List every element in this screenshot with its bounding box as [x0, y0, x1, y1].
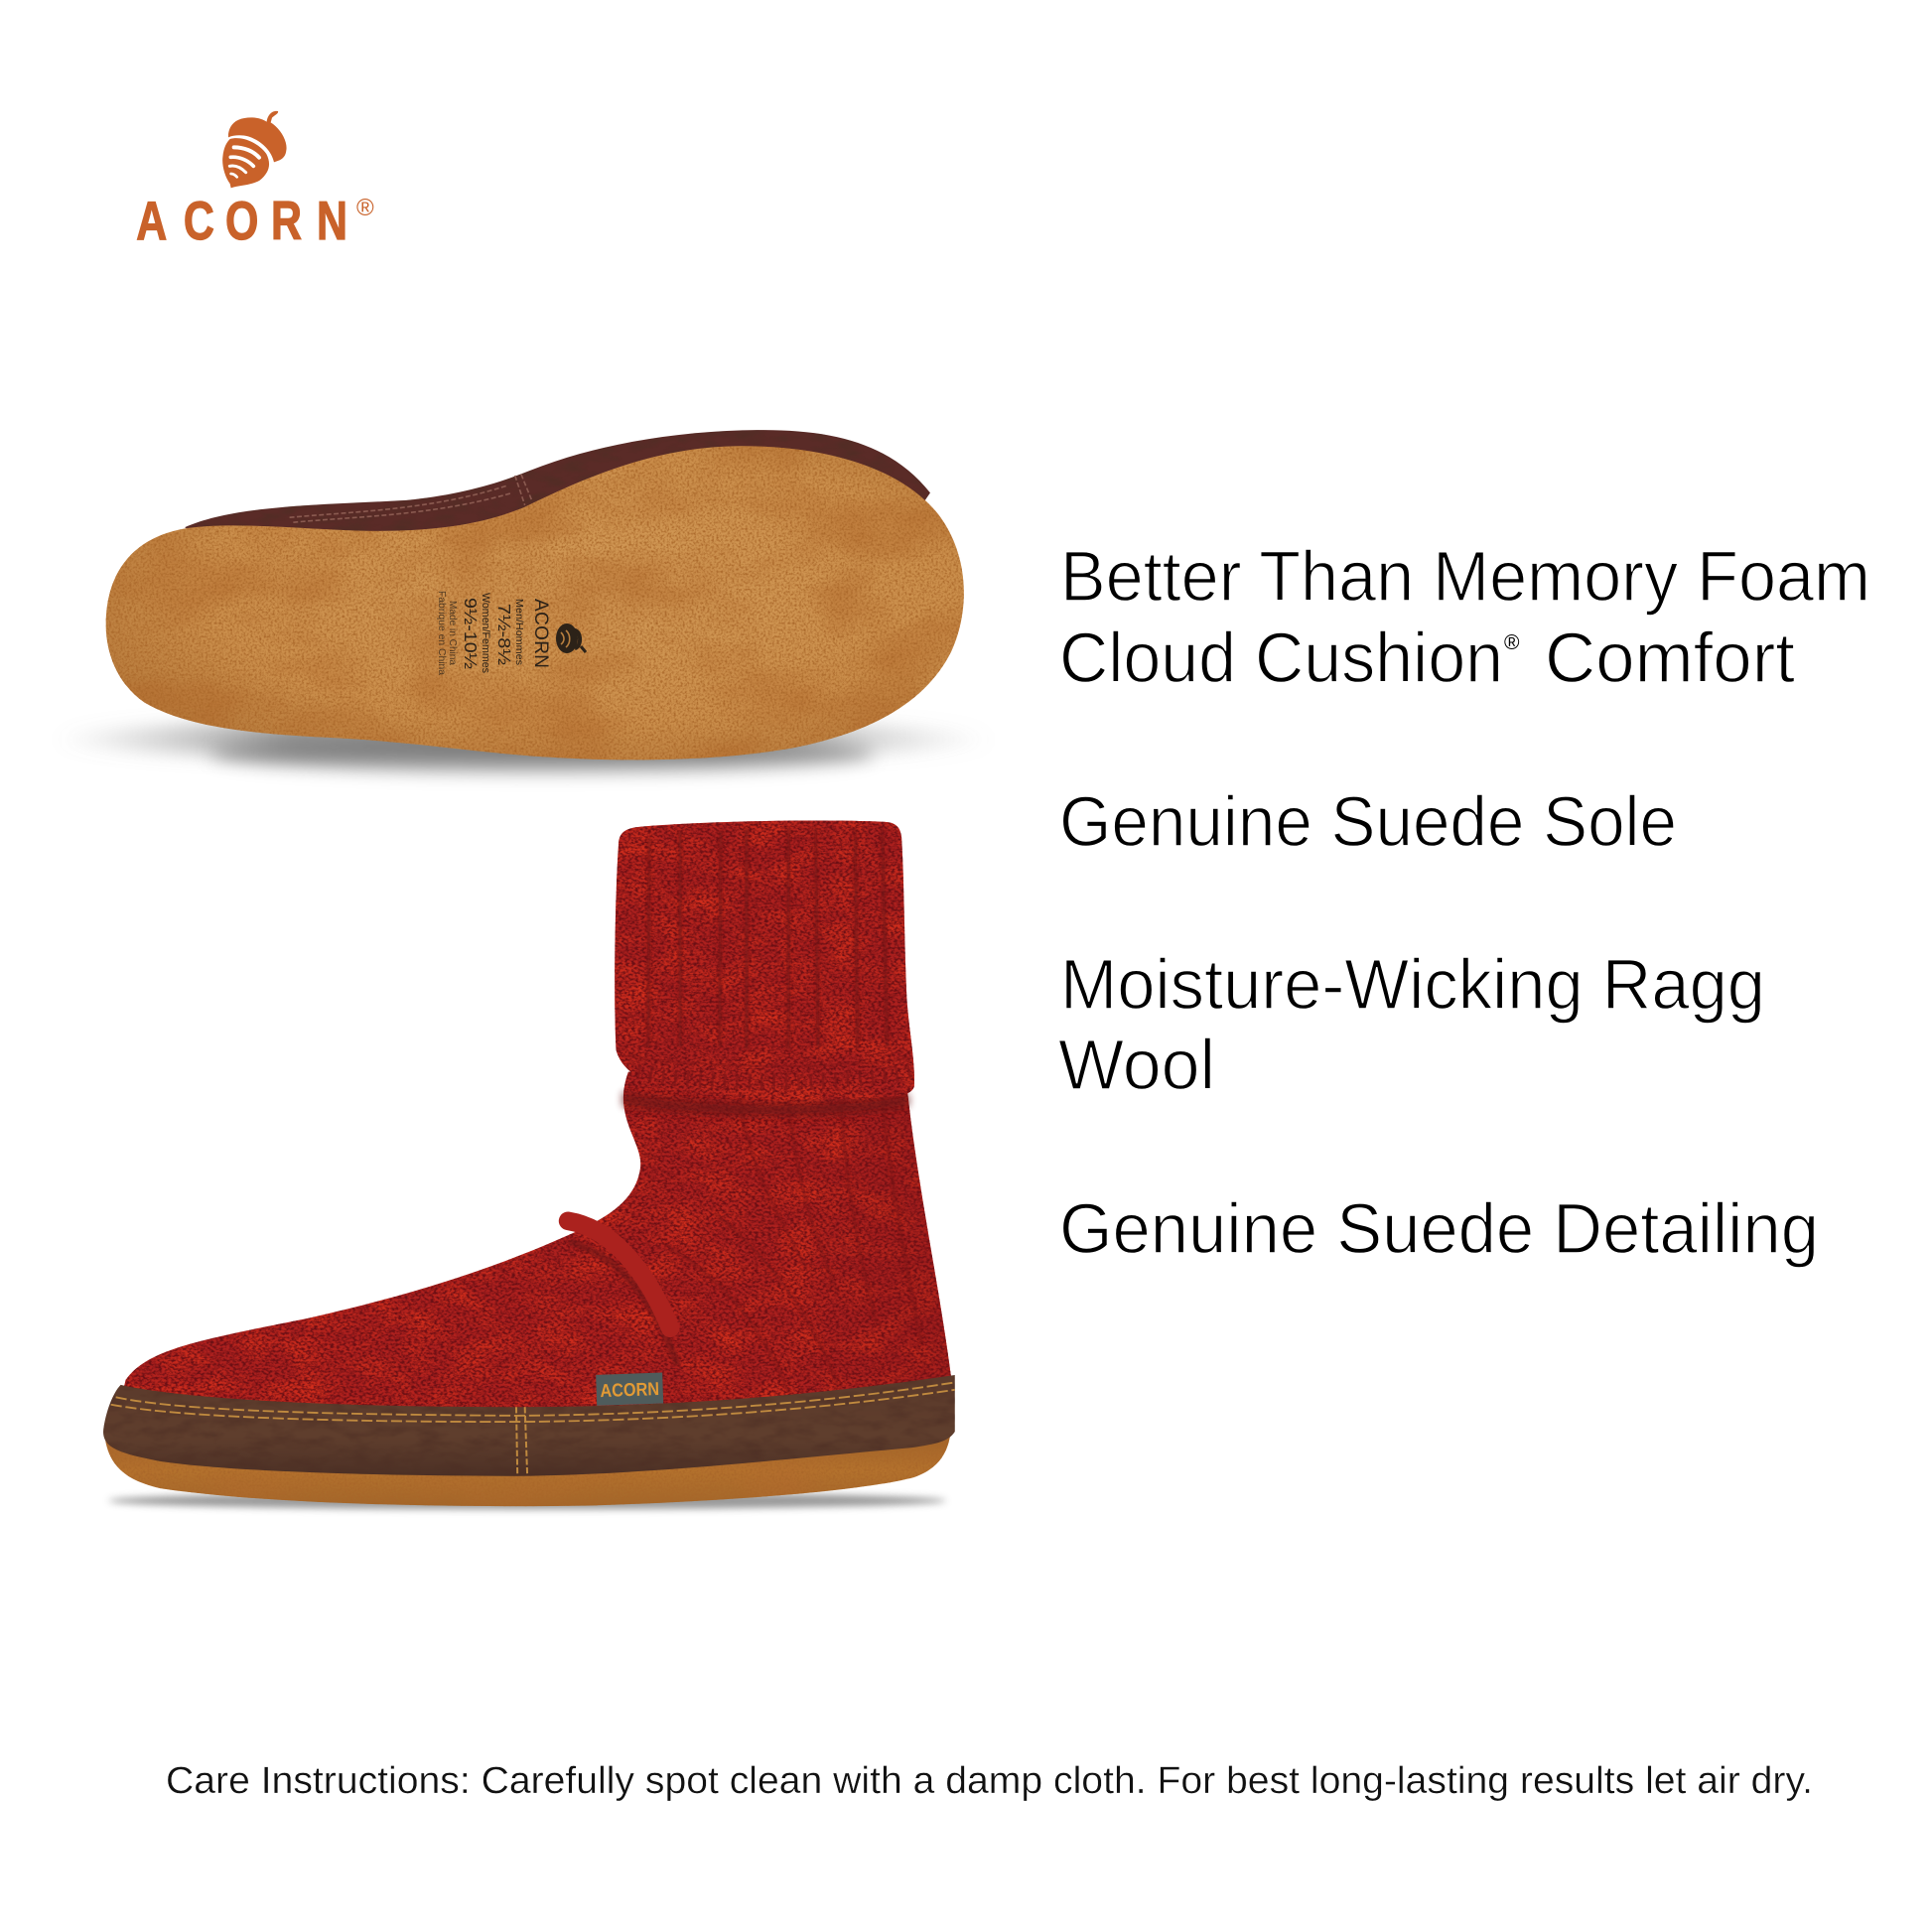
sole shadow — [56, 719, 992, 772]
printed brand: ACORN — [530, 599, 551, 668]
cuff hem — [614, 1054, 918, 1083]
folded cuff — [614, 821, 918, 1100]
sock shadow — [108, 1492, 946, 1509]
printed men size: 7½-8½ — [494, 604, 514, 665]
feature: memory foam: Better Than Memory Foam — [1060, 538, 1870, 617]
feature: cloud cushion: ® — [1504, 631, 1520, 654]
feature: cloud cushion: Cloud Cushion — [1059, 620, 1503, 698]
printed origin: Made in China — [447, 601, 458, 665]
feature: ragg wool: Wool — [1058, 1027, 1215, 1105]
printed women size: 9½-10½ — [461, 598, 481, 669]
product: slipper sole view — [56, 430, 992, 772]
sole: suede upper edge — [185, 430, 930, 592]
band stitching — [111, 1382, 955, 1422]
sole: upper stitching — [290, 475, 532, 522]
feature: ragg wool: Moisture-Wicking Ragg — [1060, 946, 1765, 1025]
woven brand tag — [596, 1373, 663, 1406]
cuff ribs — [648, 828, 888, 1049]
registered mark: ® — [356, 195, 374, 221]
band heel seam — [516, 1407, 527, 1476]
logo: Acorn brand — [136, 111, 374, 251]
sole: printed size mark — [436, 591, 586, 675]
foot fold shadow — [569, 1242, 678, 1365]
feature list — [1058, 538, 1870, 1269]
printed women size label: Women/Femmes — [480, 593, 491, 673]
sole: suede bottom — [106, 446, 964, 759]
printed men size label: Men/Hommes — [513, 599, 524, 665]
printed origin french: Fabrique en China — [436, 591, 447, 675]
icon: acorn — [222, 111, 287, 188]
feature: ragg wool — [1058, 946, 1765, 1105]
logo wordmark: ACORN — [136, 191, 347, 251]
care instructions: Care Instructions: Carefully spot clean with a damp cloth. For best long-lasting results let air dry. — [166, 1760, 1813, 1802]
leg ribs — [665, 1096, 921, 1392]
ankle roll — [568, 1221, 670, 1328]
feature: suede detailing: Genuine Suede Detailing — [1059, 1190, 1819, 1269]
icon: printed acorn — [556, 623, 586, 653]
feature: cloud cushion: Comfort — [1545, 620, 1795, 698]
feature: cloud cushion — [1059, 620, 1795, 698]
cuff shadow on leg — [622, 1092, 909, 1117]
suede outsole — [104, 1417, 951, 1506]
suede band — [103, 1375, 955, 1476]
product: slipper sock side view — [103, 821, 955, 1509]
leg shading — [860, 1094, 951, 1384]
woven brand tag: ACORN — [600, 1378, 659, 1401]
sock leg and foot — [117, 1072, 955, 1417]
feature: suede sole: Genuine Suede Sole — [1059, 783, 1677, 862]
